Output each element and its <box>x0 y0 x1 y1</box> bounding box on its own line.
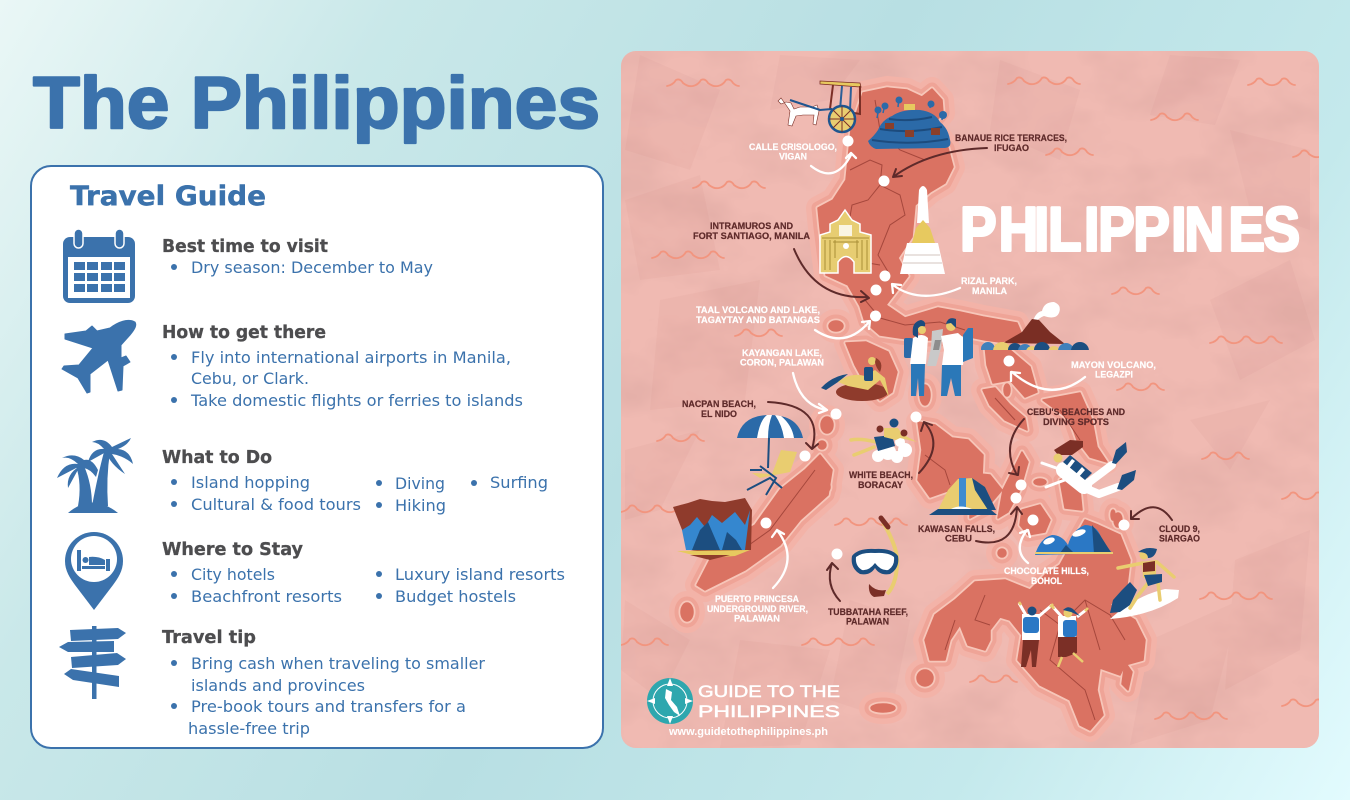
icon: kalesa horse carriage <box>778 81 861 132</box>
map labels: IFUGAO <box>994 143 1029 154</box>
philippine islands <box>681 88 1145 730</box>
logo: guide to the philippines: PHILIPPINES <box>698 702 840 721</box>
icon: chocolate hills <box>1035 525 1113 555</box>
section: where to stay: Luxury island resorts <box>395 565 565 584</box>
map labels: BORACAY <box>858 480 904 491</box>
section: travel tip: Travel tip <box>162 627 256 648</box>
icon: kawasan falls <box>929 478 997 515</box>
map labels: VIGAN <box>779 152 807 162</box>
section: travel tip: Pre-book tours and transfers for a <box>191 697 466 716</box>
icon: underground river cave <box>673 498 752 560</box>
map labels: MANILA <box>972 286 1007 297</box>
map labels: INTRAMUROS AND <box>710 221 793 232</box>
map labels: TUBBATAHA REEF, <box>828 607 908 618</box>
map labels: SIARGAO <box>1159 534 1200 544</box>
map labels: TAAL VOLCANO AND LAKE, <box>696 305 820 316</box>
map labels: EL NIDO <box>701 409 737 420</box>
map labels: CEBU <box>945 534 972 544</box>
logo: guide to the philippines <box>647 678 840 738</box>
icon: rizal monument <box>900 186 945 274</box>
section: where to stay: Where to Stay <box>162 539 303 560</box>
map labels: KAYANGAN LAKE, <box>742 348 822 359</box>
arrows: dark <box>768 148 1172 601</box>
map labels: RIZAL PARK, <box>961 276 1017 287</box>
section: what to do <box>162 447 548 515</box>
section: best time to visit <box>162 236 433 277</box>
section: where to stay <box>162 539 565 606</box>
section: where to stay: City hotels <box>191 565 275 584</box>
logo: guide to the philippines: www.guidetothephilippines.ph <box>668 726 828 738</box>
section: what to do: Cultural & food tours <box>191 495 361 514</box>
section: travel tip: islands and provinces <box>191 676 365 695</box>
icon: surfer <box>1110 548 1179 619</box>
section: how to get there <box>162 322 523 410</box>
map labels: FORT SANTIAGO, MANILA <box>693 231 810 242</box>
icon: airplane <box>62 320 136 393</box>
icon: snorkel mask <box>852 518 898 597</box>
panel: travel guide <box>31 166 603 748</box>
map labels: MAYON VOLCANO, <box>1071 360 1156 371</box>
icon: swimmer in white water <box>851 418 917 463</box>
icon: beach umbrella and chair <box>737 415 803 495</box>
heading: travel guide: Travel Guide <box>70 181 266 212</box>
section: how to get there: Fly into international airports in Manila, <box>191 348 511 367</box>
location markers <box>760 136 1130 560</box>
map labels: BOHOL <box>1031 576 1062 587</box>
map title: PHILIPPINES <box>960 195 1300 264</box>
section: travel tip: Bring cash when traveling to smaller <box>191 654 485 673</box>
section: where to stay: Beachfront resorts <box>191 587 342 606</box>
section: what to do: Diving <box>395 474 445 493</box>
map labels: PUERTO PRINCESA <box>715 594 799 605</box>
map labels: UNDERGROUND RIVER, <box>707 604 808 615</box>
section: what to do: Hiking <box>395 496 446 515</box>
map labels: DIVING SPOTS <box>1043 417 1110 428</box>
map labels: BANAUE RICE TERRACES, <box>955 133 1067 144</box>
arrows: white <box>772 153 1085 588</box>
section: what to do: What to Do <box>162 447 272 468</box>
section: what to do: Island hopping <box>191 473 310 492</box>
map labels: PALAWAN <box>734 614 780 624</box>
section: best time to visit: Dry season: December to May <box>191 258 433 277</box>
icon: banaue rice terraces <box>868 96 950 149</box>
map labels: NACPAN BEACH, <box>682 399 756 410</box>
map labels: WHITE BEACH, <box>849 470 913 481</box>
section: where to stay: Budget hostels <box>395 587 516 606</box>
icon: hotel location pin <box>65 532 123 610</box>
icon: hikers with raised arms <box>1019 602 1088 667</box>
icon: woman on inflatable ring <box>821 357 889 401</box>
title: The Philippines <box>33 63 600 144</box>
section: travel tip <box>162 627 485 738</box>
icon: intramuros fort santiago gate <box>820 210 871 273</box>
map labels: KAWASAN FALLS, <box>918 524 995 535</box>
map labels: LEGAZPI <box>1095 370 1133 380</box>
icon: scuba diver <box>1042 440 1136 494</box>
map labels: CLOUD 9, <box>1159 524 1200 535</box>
map labels: CEBU'S BEACHES AND <box>1027 407 1125 418</box>
map labels: TAGAYTAY AND BATANGAS <box>696 315 821 326</box>
sea waves <box>621 77 1340 719</box>
logo: guide to the philippines: GUIDE TO THE <box>698 682 840 701</box>
section: best time to visit: Best time to visit <box>162 236 328 257</box>
map labels: CORON, PALAWAN <box>740 358 824 368</box>
icon: travellers with map <box>904 318 973 396</box>
section: travel tip: hassle-free trip <box>188 719 310 738</box>
section: how to get there: Cebu, or Clark. <box>191 369 309 388</box>
section: how to get there: Take domestic flights or ferries to islands <box>190 391 523 410</box>
icon: palm trees <box>57 438 133 513</box>
icon: signpost <box>59 626 126 699</box>
icon: calendar <box>63 229 135 303</box>
map labels <box>682 133 1200 628</box>
icon: mayon volcano <box>981 302 1089 350</box>
map labels: CHOCOLATE HILLS, <box>1004 566 1089 577</box>
map labels: PALAWAN <box>846 616 889 628</box>
section: what to do: Surfing <box>490 473 548 492</box>
section: how to get there: How to get there <box>162 322 326 343</box>
logo emblem <box>647 678 693 724</box>
map labels: CALLE CRISOLOGO, <box>749 142 837 153</box>
panel: illustrated map <box>621 51 1340 748</box>
